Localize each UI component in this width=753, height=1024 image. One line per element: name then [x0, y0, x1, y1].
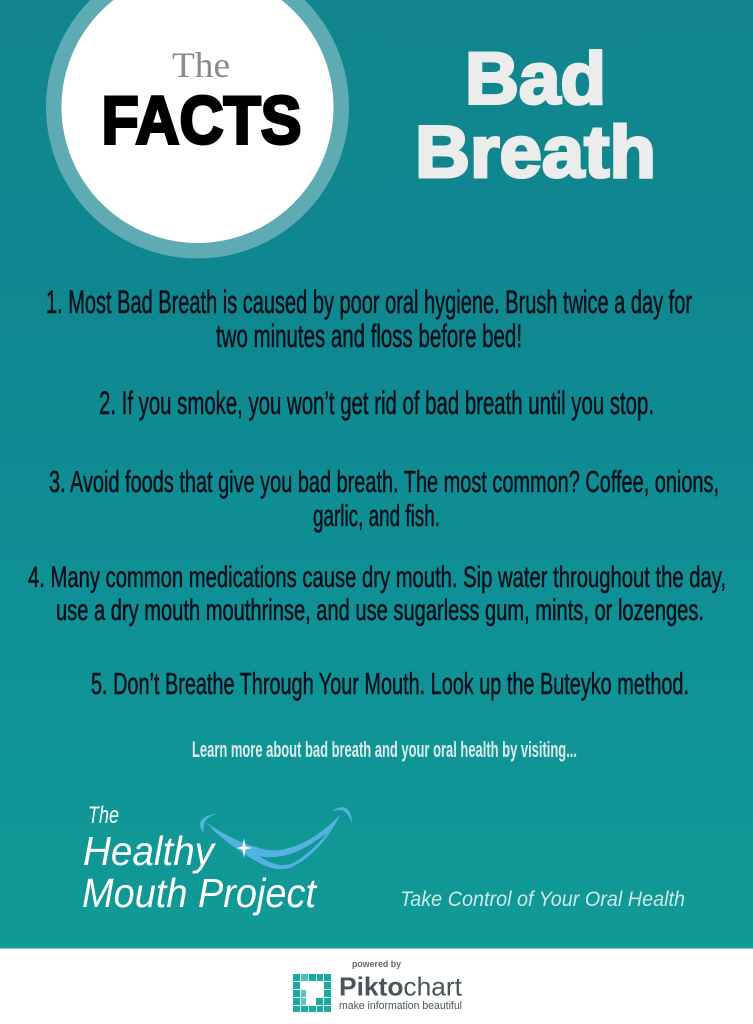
- Piktochart wordmark: Piktochart: [339, 972, 463, 1002]
- logo wordmark: Mouth Project: [82, 870, 317, 916]
- logo wordmark: Healthy: [83, 828, 216, 874]
- badge: The Facts: The: [172, 45, 230, 85]
- badge: The Facts: [46, 0, 349, 258]
- badge: The Facts: FACTS: [102, 82, 302, 158]
- logo wordmark: The: [88, 802, 119, 829]
- Piktochart wordmark: make information beautiful: [339, 1000, 462, 1012]
- fact 1: [46, 284, 692, 354]
- title: Bad Breath: Bad: [465, 38, 606, 120]
- fact 3: [49, 464, 719, 533]
- logo wordmark: [82, 802, 317, 916]
- icon: smile: [200, 807, 352, 869]
- title: Bad Breath: Breath: [415, 112, 656, 193]
- powered by label: powered by: [352, 959, 401, 969]
- tagline: Take Control of Your Oral Health: [400, 888, 685, 911]
- footer panel: [0, 948, 753, 1024]
- fact 3: garlic, and fish.: [313, 498, 440, 533]
- fact 4: [28, 561, 726, 627]
- icon: Piktochart logo: [293, 974, 331, 1012]
- fact 1: two minutes and floss before bed!: [216, 318, 522, 354]
- logo: The Healthy Mouth Project: [82, 802, 352, 916]
- title: Bad Breath: [415, 38, 656, 193]
